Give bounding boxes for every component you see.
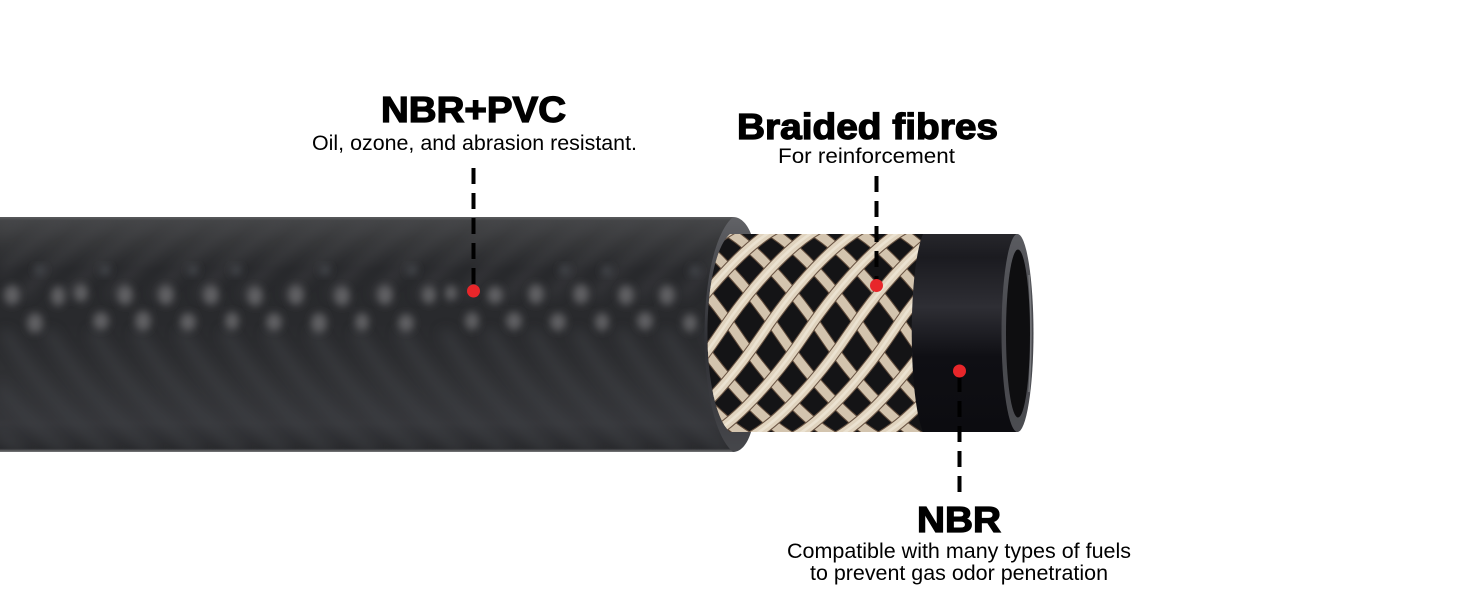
heading: Braided fibres: Braided fibres: [737, 106, 998, 147]
description: NBR: to prevent gas odor penetration: [810, 562, 1108, 585]
marker dot: NBR: [953, 364, 966, 378]
sleeve end ring: [1002, 234, 1034, 432]
leader line: Braided fibres: [874, 176, 878, 283]
callout: NBR: [787, 364, 1131, 585]
inner NBR sleeve: [912, 234, 1034, 432]
heading: NBR: NBR: [917, 499, 1001, 540]
strands leaning up-right: [708, 234, 920, 432]
hose construction diagram: [0, 96, 1130, 584]
description: NBR+PVC: Oil, ozone, and abrasion resistant.: [312, 132, 637, 155]
description: Braided fibres: For reinforcement: [778, 145, 955, 168]
callout: Braided fibres: [737, 106, 998, 292]
heading: NBR+PVC: NBR+PVC: [381, 89, 566, 130]
outer hose: NBR+PVC cover: [0, 217, 751, 452]
strands leaning down-right: [708, 234, 923, 432]
marker dot: Braided fibres: [870, 279, 883, 292]
cut end ring of cover: [704, 217, 751, 452]
leader line: NBR: [958, 372, 962, 492]
leader line: NBR+PVC: [472, 168, 476, 288]
braided fibres layer: [708, 234, 923, 432]
callout: NBR+PVC: [312, 89, 637, 298]
description: NBR: Compatible with many types of fuels: [787, 540, 1131, 563]
texture: blurred woven strands on cover: [0, 261, 708, 340]
marker dot: NBR+PVC: [467, 284, 480, 298]
sleeve inner opening: [1006, 250, 1030, 418]
description: NBR: [787, 540, 1131, 585]
